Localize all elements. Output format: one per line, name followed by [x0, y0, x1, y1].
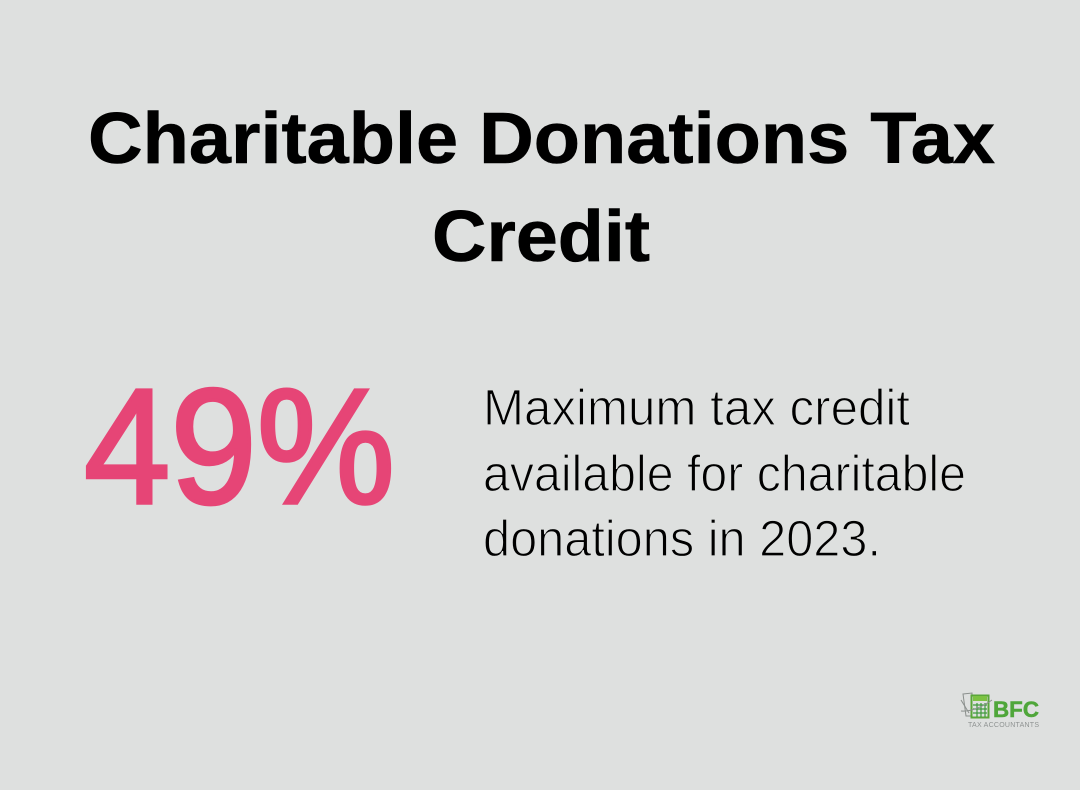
icon: calculator and documents — [961, 693, 992, 718]
description text: available for charitable — [483, 445, 966, 502]
description text — [483, 379, 966, 567]
description text: Maximum tax credit — [483, 379, 910, 436]
logo wordmark: BFC — [993, 697, 1039, 722]
logo tagline: TAX ACCOUNTANTS — [968, 722, 1039, 729]
description text: donations in 2023. — [483, 510, 881, 567]
title — [88, 99, 995, 277]
title: Credit — [432, 197, 650, 277]
logo: BFC Tax Accountants — [961, 693, 1039, 729]
statistic: 49%: 49% — [84, 355, 395, 538]
title: Charitable Donations Tax — [88, 99, 995, 179]
